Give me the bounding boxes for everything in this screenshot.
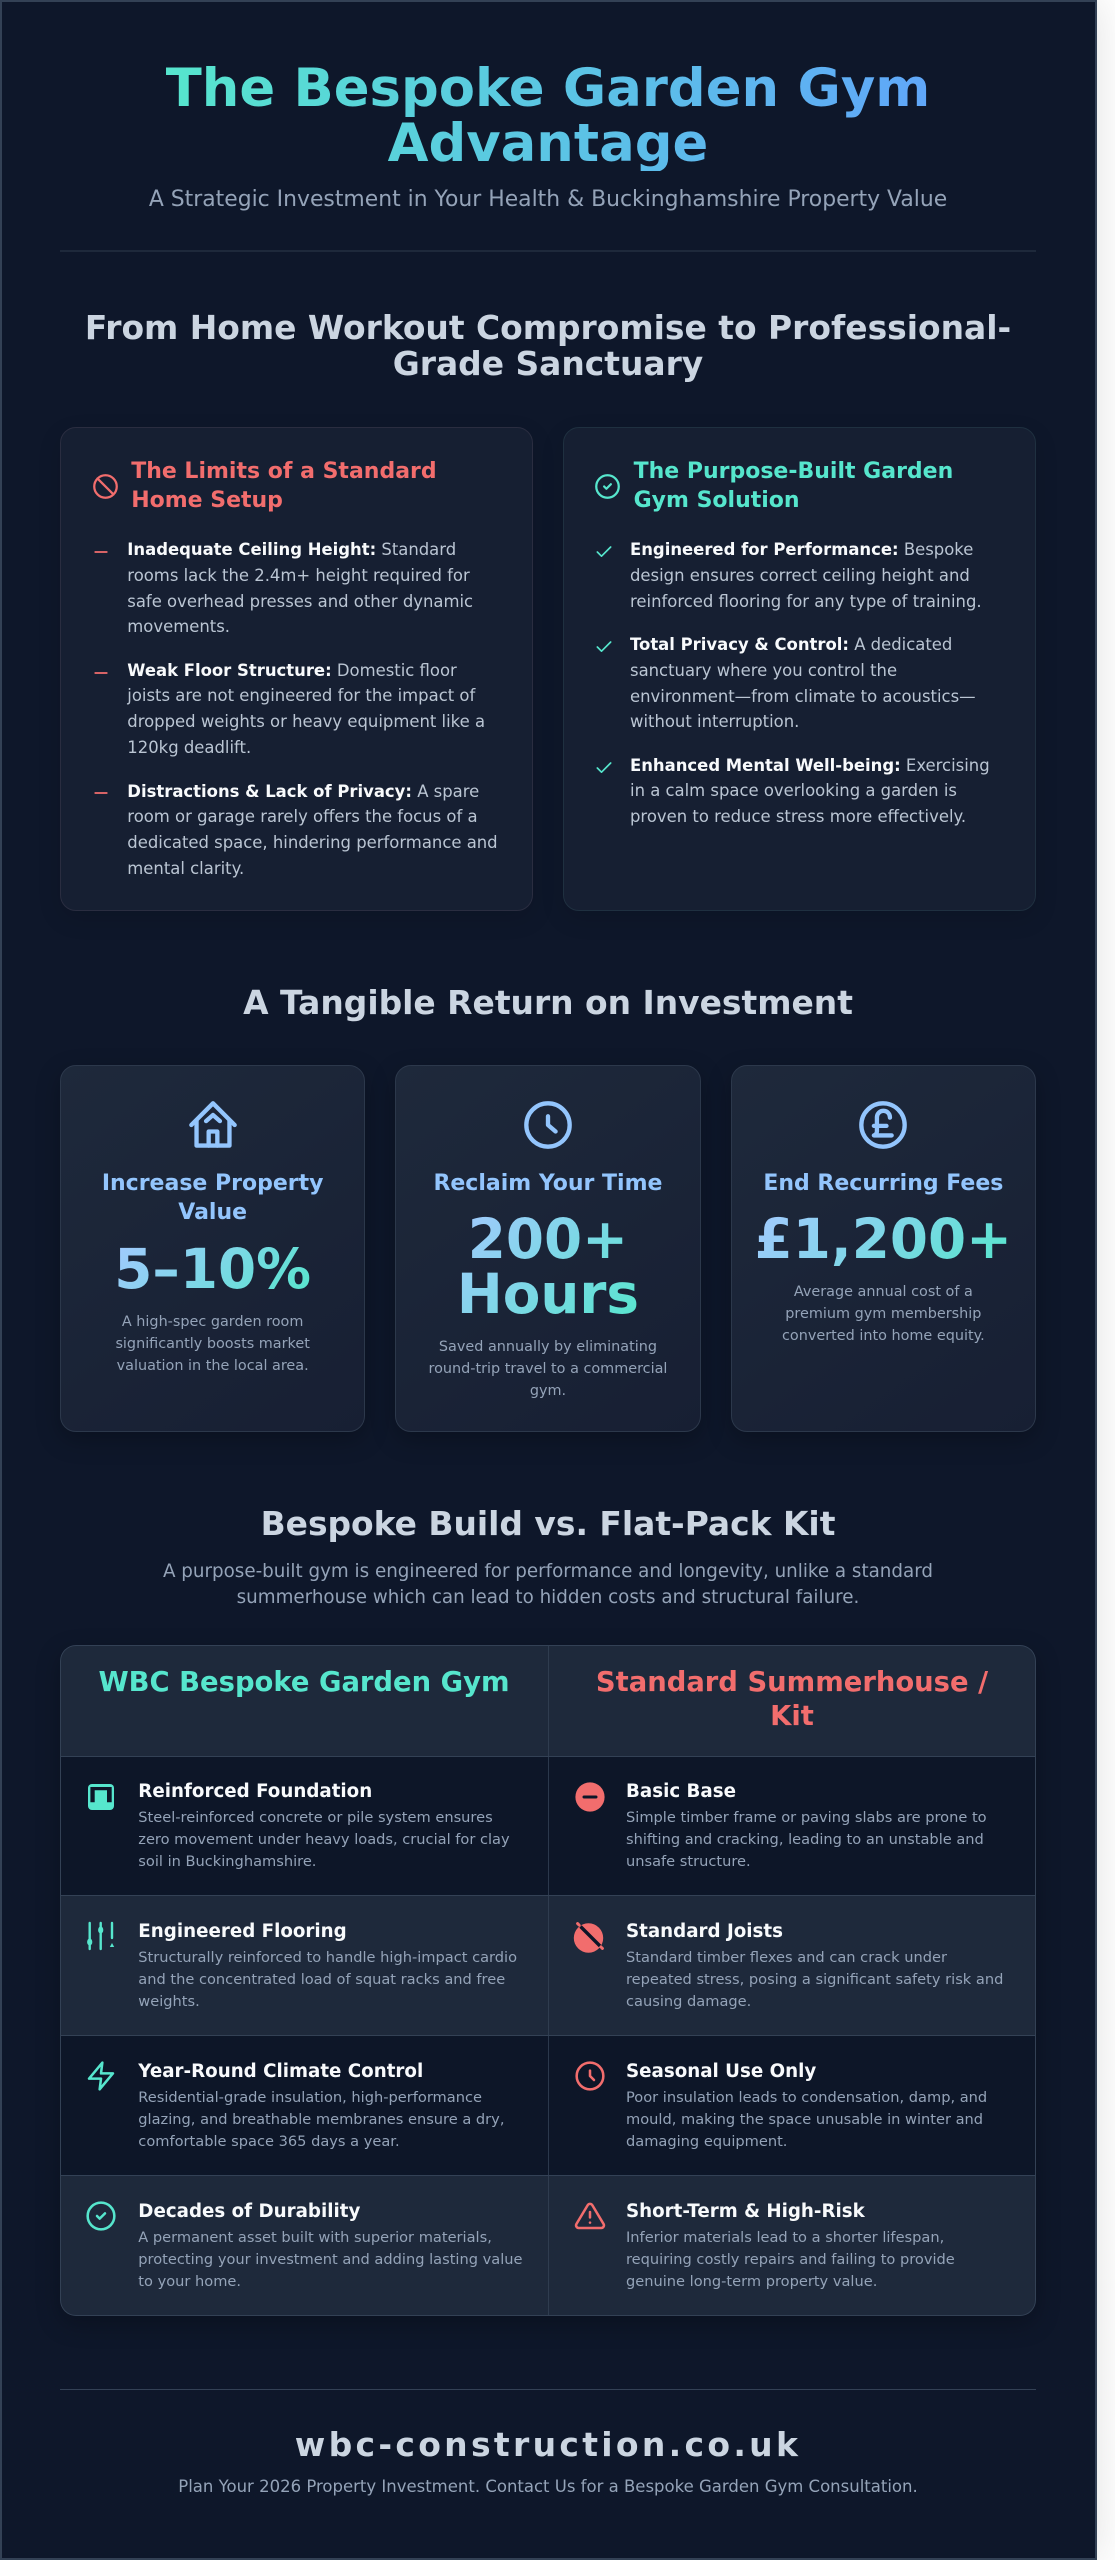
section heading: comparison: Bespoke Build vs. Flat-Pack Kit (261, 1504, 835, 1543)
icon: check circle (595, 474, 620, 499)
comparison table (60, 1645, 1036, 2316)
table row: foundation (60, 1756, 1036, 1896)
table row: climate (60, 2035, 1036, 2175)
list item: ceiling height: safe overhead presses and other dynamic (127, 592, 473, 611)
list item: mental well-being (596, 756, 990, 826)
cell: seasonal use: damaging equipment. (626, 2133, 787, 2150)
panel: end recurring fees (731, 1065, 1036, 1432)
icon: ban (93, 474, 118, 499)
cell: short-term risk: requiring costly repairs and failing to provide (626, 2251, 955, 2268)
card description: Saved annually by eliminating (439, 1339, 657, 1355)
cell: decades of durability: protecting your investment and adding lasting value (138, 2251, 522, 2268)
cell: seasonal use (575, 2061, 987, 2150)
card description: gym. (530, 1383, 566, 1399)
list item: privacy: without interruption. (630, 712, 799, 731)
column header: standard kit: Kit (770, 1701, 814, 1732)
cell: climate control (88, 2061, 504, 2150)
stat: 200+ hours: Hours (457, 1262, 639, 1326)
card description: premium gym membership (785, 1306, 981, 1322)
list item: distractions: mental clarity. (127, 859, 244, 878)
card title: Reclaim Your Time (433, 1171, 662, 1196)
card description: A high-spec garden room (122, 1314, 303, 1330)
card description: valuation in the local area. (117, 1358, 309, 1374)
cell: decades of durability: to your home. (138, 2273, 241, 2290)
table row: flooring (60, 1895, 1036, 2035)
cell: climate control: comfortable space 365 days a year. (138, 2133, 400, 2150)
subtitle: A Strategic Investment in Your Health & Buckinghamshire Property Value (149, 187, 947, 212)
cell: engineered flooring: weights. (138, 1993, 200, 2010)
panel: limits of a standard home setup (60, 427, 533, 911)
cell: seasonal use: Poor insulation leads to condensation, damp, and (626, 2089, 987, 2106)
card description: round-trip travel to a commercial (428, 1361, 667, 1377)
list item: distractions: room or garage rarely offers the focus of a (127, 807, 478, 826)
stat: 200+ hours (457, 1207, 639, 1326)
section intro text: summerhouse which can lead to hidden costs and structural failure. (237, 1587, 859, 1608)
cell: reinforced foundation: Steel-reinforced concrete or pile system ensures (138, 1809, 493, 1826)
panel: increase property value (60, 1065, 365, 1432)
panel heading: Gym Solution (634, 488, 800, 513)
cell: decades of durability: A permanent asset built with superior materials, (138, 2229, 492, 2246)
card description (782, 1284, 985, 1344)
card description (115, 1314, 310, 1374)
stat: 5-10%: 5–10% (114, 1237, 311, 1301)
cell: reinforced foundation (88, 1781, 510, 1870)
card description: Average annual cost of a (794, 1284, 973, 1300)
card title (102, 1171, 323, 1225)
cell: basic base: Basic Base (626, 1781, 736, 1802)
list item: privacy: Total Privacy & Control: A dedicated (630, 635, 952, 654)
list item: floor structure (94, 661, 485, 757)
cell: short-term risk: Inferior materials lead to a shorter lifespan, (626, 2229, 944, 2246)
list item: mental well-being: in a calm space overlooking a garden is (630, 781, 957, 800)
cell: decades of durability (86, 2200, 522, 2290)
list item: distractions: Distractions & Lack of Privacy: A spare (127, 782, 479, 800)
panel: purpose-built garden gym solution (563, 427, 1036, 911)
cell: standard joists: causing damage. (626, 1993, 751, 2010)
panel heading (634, 459, 953, 513)
list item: mental well-being: proven to reduce stress more effectively. (630, 807, 966, 826)
card description (428, 1339, 667, 1399)
column header: standard kit (596, 1667, 988, 1732)
panel heading: The Limits of a Standard (131, 459, 437, 484)
card title: Increase Property (102, 1171, 323, 1196)
list item: ceiling height: movements. (127, 617, 230, 636)
cell: standard joists: Standard timber flexes and can crack under (626, 1949, 947, 1966)
card title: End Recurring Fees (763, 1171, 1003, 1196)
list item: distractions (94, 782, 498, 878)
list item: distractions: dedicated space, hindering performance and (127, 833, 498, 852)
cell: basic base (575, 1781, 987, 1870)
stat: £1,200+: £1,200+ (755, 1207, 1012, 1271)
section intro text: A purpose-built gym is engineered for performance and longevity, unlike a standard (163, 1561, 933, 1582)
list item: floor structure: 120kg deadlift. (127, 738, 251, 757)
list item: performance (596, 540, 982, 611)
cell: basic base: unsafe structure. (626, 1853, 751, 1870)
cell: engineered flooring: Engineered Flooring (138, 1921, 347, 1942)
title: Advantage (388, 113, 708, 174)
card description: converted into home equity. (782, 1328, 985, 1344)
panel heading: Home Setup (131, 488, 283, 513)
list item: floor structure: joists are not engineered for the impact of (127, 686, 475, 705)
list item: privacy (596, 635, 976, 731)
list item: mental well-being: Enhanced Mental Well-being: Exercising (630, 756, 990, 775)
column header: WBC: WBC Bespoke Garden Gym (98, 1667, 510, 1698)
card title: Value (178, 1200, 247, 1225)
cell: standard joists (574, 1921, 1003, 2010)
list item: privacy: environment—from climate to acoustics— (630, 687, 976, 706)
title (166, 58, 930, 174)
section heading: sanctuary: From Home Workout Compromise to Professional- (85, 308, 1011, 346)
list item: privacy: sanctuary where you control the (630, 661, 897, 680)
panel: reclaim your time (395, 1065, 701, 1432)
list item: ceiling height: rooms lack the 2.4m+ height required for (127, 566, 470, 585)
section intro text (163, 1561, 933, 1608)
list item: floor structure: Weak Floor Structure: Domestic floor (127, 661, 457, 680)
card description: significantly boosts market (115, 1336, 310, 1352)
panel heading: The Purpose-Built Garden (634, 459, 953, 484)
icon: pound coin (859, 1101, 907, 1149)
cell: reinforced foundation: Reinforced Foundation (138, 1781, 372, 1802)
cell: engineered flooring: and the concentrated load of squat racks and free (138, 1971, 505, 1988)
icon: house (189, 1101, 237, 1148)
list item: ceiling height (94, 540, 473, 636)
cell: seasonal use: mould, making the space unusable in winter and (626, 2111, 983, 2128)
cell: engineered flooring: Structurally reinforced to handle high-impact cardio (138, 1949, 517, 1966)
cell: standard joists: repeated stress, posing a significant safety risk and (626, 1971, 1003, 1988)
section heading: return on investment: A Tangible Return on Investment (243, 982, 853, 1022)
cell: reinforced foundation: zero movement under heavy loads, crucial for clay (138, 1831, 510, 1848)
footer call to action: Plan Your 2026 Property Investment. Contact Us for a Bespoke Garden Gym Consultation. (178, 2477, 918, 2496)
cell: basic base: shifting and cracking, leading to an unstable and (626, 1831, 984, 1848)
cell: standard joists: Standard Joists (626, 1921, 783, 1942)
table row: durability (60, 2175, 1036, 2316)
cell: climate control: Residential-grade insulation, high-performance (138, 2089, 482, 2106)
list item: performance: design ensures correct ceiling height and (630, 566, 970, 585)
section heading: sanctuary: Grade Sanctuary (393, 344, 703, 382)
cell: reinforced foundation: soil in Buckinghamshire. (138, 1853, 316, 1870)
cell: engineered flooring (87, 1921, 517, 2010)
list item: performance: Engineered for Performance: Bespoke (630, 540, 973, 559)
stat: 200+ hours: 200+ (468, 1207, 628, 1271)
icon: clock (524, 1101, 572, 1149)
cell: decades of durability: Decades of Durability (138, 2200, 360, 2222)
cell: climate control: Year-Round Climate Control (138, 2061, 423, 2082)
panel heading (131, 459, 437, 513)
list item: ceiling height: Inadequate Ceiling Height: Standard (127, 540, 456, 559)
list item: floor structure: dropped weights or heavy equipment like a (127, 712, 485, 731)
footer website: wbc-construction.co.uk (295, 2425, 801, 2464)
column header: standard kit: Standard Summerhouse / (596, 1667, 988, 1698)
title: The Bespoke Garden Gym (166, 58, 930, 119)
section heading: sanctuary (85, 308, 1011, 382)
cell: basic base: Simple timber frame or paving slabs are prone to (626, 1809, 987, 1826)
cell: short-term risk: genuine long-term property value. (626, 2273, 877, 2290)
cell: short-term risk: Short-Term & High-Risk (626, 2200, 865, 2222)
list item: performance: reinforced flooring for any type of training. (630, 592, 982, 611)
cell: climate control: glazing, and breathable membranes ensure a dry, (138, 2111, 504, 2128)
cell: short-term risk (574, 2200, 955, 2290)
cell: seasonal use: Seasonal Use Only (626, 2061, 816, 2082)
